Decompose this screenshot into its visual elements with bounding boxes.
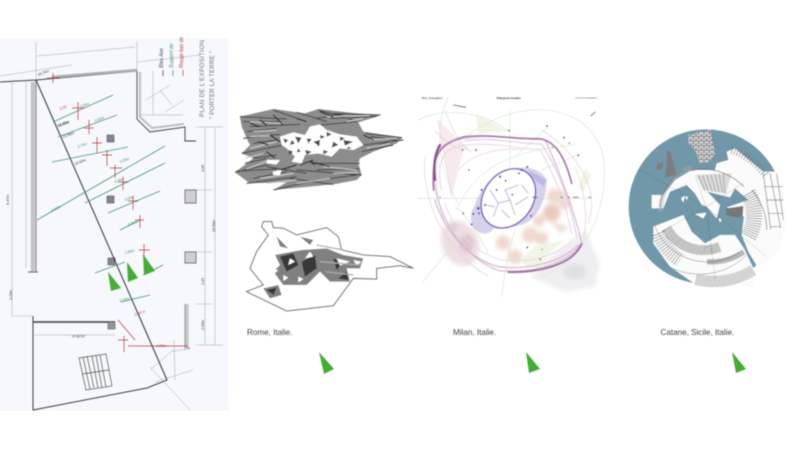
dark markers <box>439 105 595 260</box>
handwritten dimension labels: 6,93m <box>51 205 61 213</box>
icon: green cone Milan <box>526 352 540 373</box>
legend: Rouge bas de <box>179 37 185 68</box>
fan: upper-left pink <box>438 120 472 197</box>
map: Rome territory outline <box>247 222 413 311</box>
handwritten dimension labels: 18,56m <box>212 220 216 232</box>
land: lower-right fade <box>753 247 787 287</box>
handwritten dimension labels: 9,47m <box>6 195 10 205</box>
orange clusters <box>496 189 570 264</box>
legend <box>159 37 185 76</box>
handwritten dimension labels: 2,52 <box>58 105 67 111</box>
Mediterranean islands <box>681 195 722 223</box>
purple network nodes <box>471 166 532 225</box>
handwritten dimension labels <box>6 69 216 348</box>
icon: green viewpoint cones <box>108 254 155 291</box>
handwritten dimension labels: 13,90m <box>62 131 75 139</box>
handwritten dimension labels: 16,75m <box>37 69 50 77</box>
Scandinavia <box>688 130 715 163</box>
handwritten dimension labels: 3,45 <box>201 278 205 285</box>
handwritten dimension labels: 14,50m <box>57 120 71 128</box>
diagram header <box>422 96 597 100</box>
inner purple network <box>485 185 528 218</box>
handwritten dimension labels: 4,62m <box>94 116 105 123</box>
diagram header: Diálogoria visuales <box>497 96 521 100</box>
thin pink arcs <box>425 110 592 277</box>
graticule <box>640 170 767 277</box>
lower-left pink cluster <box>434 214 486 272</box>
handwritten dimension labels: 2,60m <box>126 220 138 227</box>
panel: Rome <box>235 109 413 374</box>
purple halo <box>471 168 547 234</box>
lower-right grey mesh <box>530 230 600 292</box>
red marks <box>47 73 188 352</box>
map: Mediterranean circular anamorphosis <box>629 129 787 287</box>
Italy radial hatching <box>696 173 732 193</box>
handwritten dimension labels: 0,40 m <box>134 309 146 317</box>
handwritten dimension labels: 14,50 m <box>72 334 85 338</box>
handwritten dimension labels: 3,25m <box>119 157 130 164</box>
map: Rome streak drawing <box>235 109 403 190</box>
thin green arcs <box>418 97 604 297</box>
land: Africa <box>653 215 757 287</box>
panel: hand-drawn exhibition plan <box>0 37 229 411</box>
panel: Catane <box>629 129 787 373</box>
sea disc <box>629 129 783 284</box>
main axis <box>36 80 167 380</box>
pale green cluster <box>522 240 565 268</box>
outer purple ring <box>433 136 582 272</box>
icon: green cone Catane <box>732 352 746 373</box>
caption: Milan: Milan, Italie. <box>453 328 496 337</box>
dimension lines <box>0 42 223 410</box>
diagram header: procesos metropolitanos <box>576 96 597 99</box>
plan title: PLAN DE L'EXPOSITION <box>199 40 206 117</box>
handwritten dimension labels: 2,90m <box>201 320 205 331</box>
handwritten dimension labels: 2,70m <box>76 142 88 149</box>
handwritten dimension labels: 12,50m <box>74 158 87 166</box>
handwritten dimension labels: 1,80m <box>124 249 135 255</box>
handwritten dimension labels: 3,15m <box>9 290 13 300</box>
legend: Support de <box>169 43 175 68</box>
caption: Rome: Rome, Italie. <box>247 328 292 337</box>
staircase <box>79 354 112 390</box>
legend: Bleu Axe <box>159 48 165 68</box>
Greece <box>726 206 743 217</box>
handwritten dimension labels: 3,60m <box>79 102 90 109</box>
caption: Catane: Catane, Sicile, Italie. <box>660 328 734 337</box>
British Isles <box>656 151 677 177</box>
map: Milan network diagram <box>418 96 604 297</box>
panel: Milan <box>418 96 604 373</box>
diagram header: Milan, Grancagliano <box>422 97 443 100</box>
central white ellipse <box>470 158 547 238</box>
graduated arcs <box>655 150 783 281</box>
plan title <box>199 40 216 119</box>
handwritten dimension labels: 4,85m <box>114 177 125 184</box>
handwritten dimension labels: 4,95 <box>201 165 205 172</box>
plan title: " PORTER LA TERRE " <box>209 51 216 119</box>
white urban void <box>280 124 363 163</box>
icon: green cone Rome <box>319 352 334 374</box>
plan walls <box>0 70 196 410</box>
handwritten dimension labels: 0,30m <box>119 297 130 303</box>
handwritten dimension labels: 3,00m <box>156 344 166 348</box>
land: Europe and Middle East <box>652 148 787 268</box>
handwritten dimension labels: 3,80m <box>124 195 135 202</box>
fan: pale green <box>477 115 507 133</box>
green axes <box>37 95 165 302</box>
